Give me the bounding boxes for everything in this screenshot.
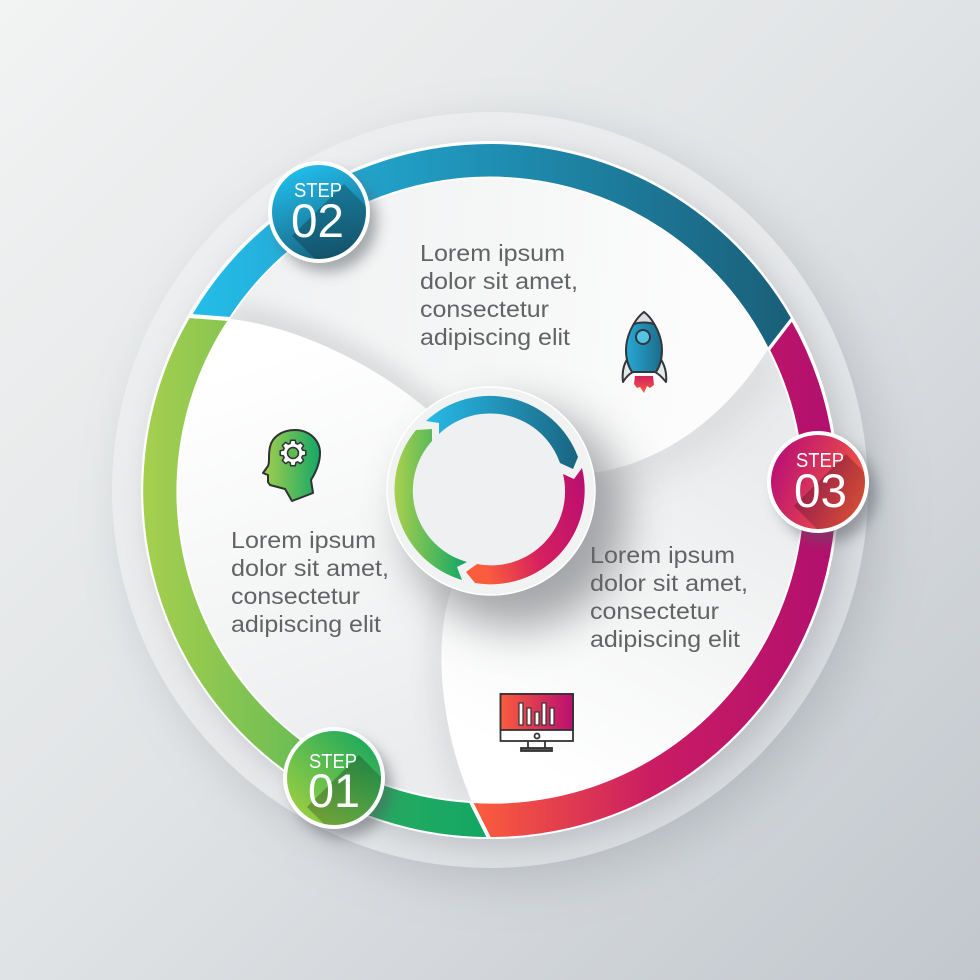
panel: step 03 wedge — [579, 350, 800, 704]
text block: step 01: adipiscing elit — [231, 611, 382, 637]
text block: step 03: adipiscing elit — [590, 626, 741, 652]
ring segment: green — [142, 317, 488, 838]
panel: step 01 wedge — [177, 319, 490, 802]
text block: step 01: consectetur — [231, 583, 360, 609]
text block: step 03: consectetur — [590, 598, 719, 624]
ring segment: blue — [191, 143, 792, 349]
ring segment: magenta to orange — [472, 320, 837, 838]
text block: step 02: adipiscing elit — [420, 324, 571, 350]
badge: step 02 — [268, 161, 385, 280]
centre disc — [387, 387, 626, 628]
text block: step 02: dolor sit amet, — [420, 268, 578, 294]
number: 02: 02 — [291, 194, 344, 247]
centre arrow: green — [395, 429, 467, 580]
icon: rocket — [623, 312, 666, 393]
label: STEP 02: STEP — [294, 180, 342, 202]
text block: step 01: dolor sit amet, — [231, 555, 389, 581]
text block: step 02: Lorem ipsum — [420, 240, 565, 266]
panel: step 02 wedge — [230, 178, 560, 408]
outer halo disc — [112, 112, 883, 883]
number: 01: 01 — [308, 764, 360, 817]
icon: head with gear — [263, 430, 320, 501]
badge: step 03 — [767, 431, 884, 550]
label: STEP 01: STEP — [309, 751, 357, 773]
text block: step 02: consectetur — [420, 296, 549, 322]
badge: step 01 — [283, 727, 400, 845]
text block: step 01: Lorem ipsum — [231, 527, 376, 553]
icon: monitor with bar chart — [500, 694, 573, 751]
number: 03: 03 — [794, 464, 847, 517]
text block: step 03: dolor sit amet, — [590, 570, 748, 596]
centre arrow: magenta — [466, 468, 585, 584]
text block: step 03: Lorem ipsum — [590, 542, 735, 568]
label: STEP 03: STEP — [796, 450, 844, 472]
centre arrow: blue — [426, 396, 578, 469]
